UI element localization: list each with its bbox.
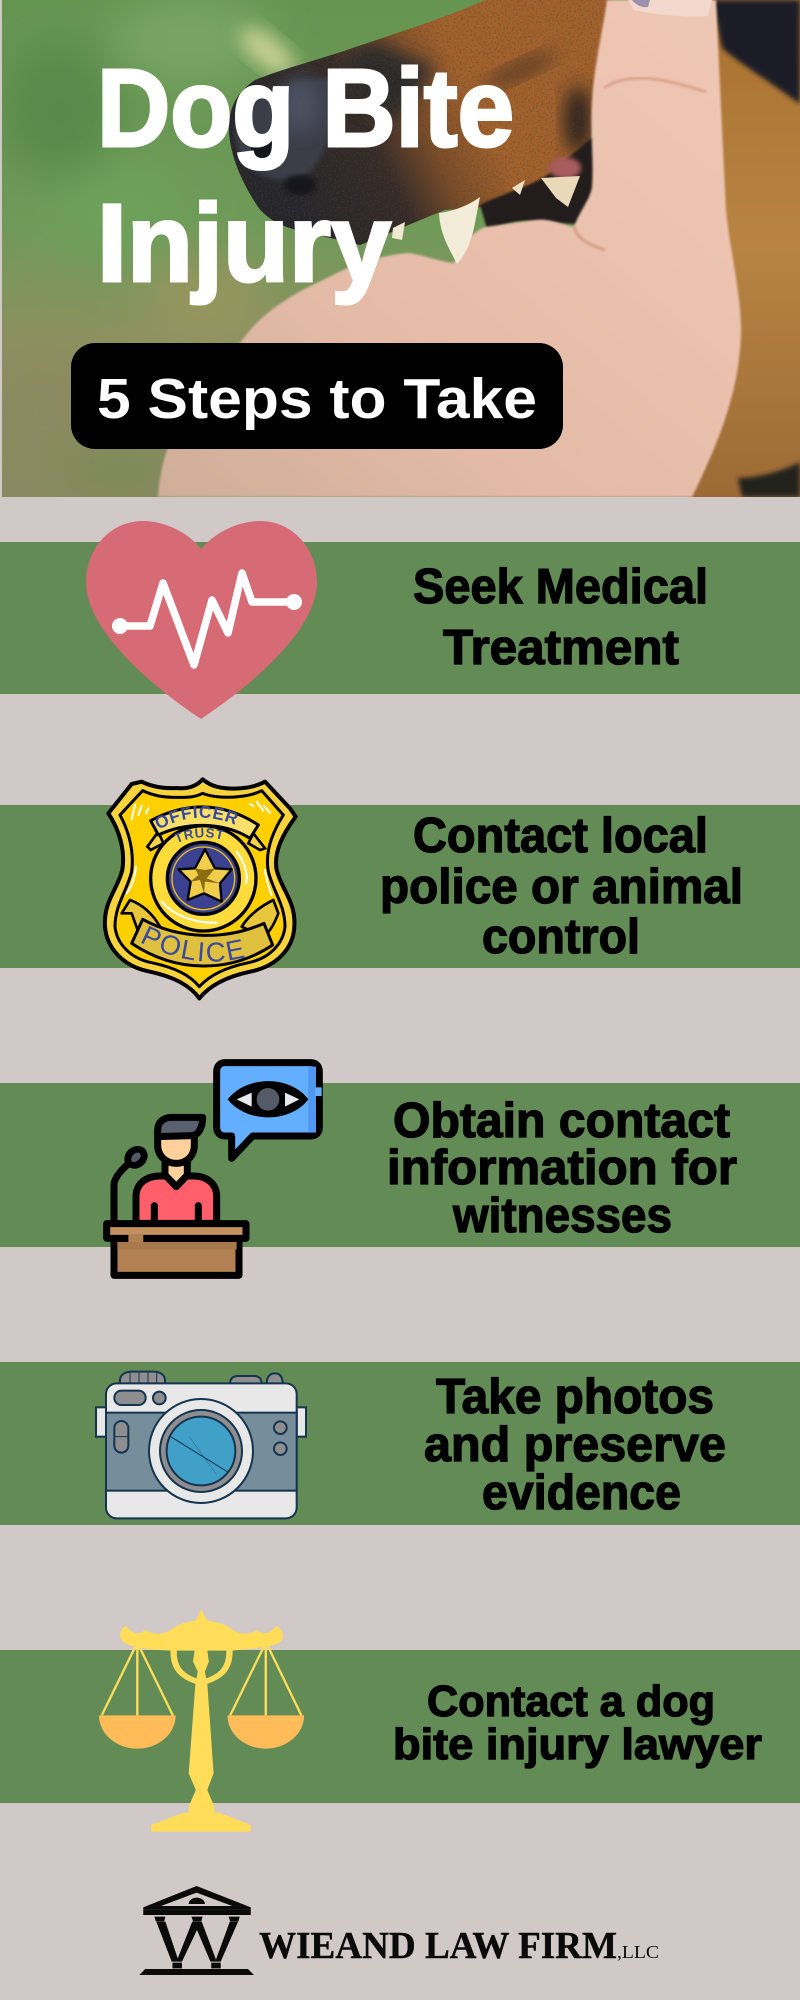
- title: Dog Bite Injury: Dog Bite: [97, 47, 514, 170]
- step 4 text: [424, 1370, 726, 1520]
- subtitle pill: 5 Steps to Take: 5 Steps to Take: [97, 367, 537, 431]
- subtitle pill: 5 Steps to Take: [71, 343, 563, 449]
- dog mouth interior: [480, 135, 595, 232]
- step 3 text: Obtain contact: [393, 1094, 730, 1148]
- teeth: [439, 197, 480, 264]
- logo emblem: columned temple with W: [139, 1886, 254, 1975]
- step 2 text: [380, 809, 743, 964]
- logo suffix: ,LLC: [617, 1942, 659, 1962]
- step 3 text: information for: [387, 1141, 737, 1195]
- icon: heart with pulse line: [86, 521, 317, 719]
- step 4 band: take photos and preserve evidence: [0, 1362, 800, 1525]
- step 1 text: [413, 560, 708, 675]
- step 5 text: bite injury lawyer: [393, 1720, 762, 1769]
- step 2 band: contact police or animal control: [0, 777, 800, 1000]
- step 4 text: and preserve: [424, 1418, 726, 1472]
- dog fur right side: [690, 0, 800, 497]
- step 5 text: Contact a dog: [427, 1677, 715, 1726]
- icon: scales of justice: [99, 1609, 304, 1832]
- step 2 text: police or animal: [380, 860, 743, 914]
- step 3 text: [387, 1094, 737, 1243]
- icon: witness at podium with eye speech bubble: [107, 1063, 322, 1275]
- title: Dog Bite Injury: [97, 47, 514, 305]
- step 5 band: contact a dog bite injury lawyer: [0, 1609, 800, 1832]
- step 2 text: Contact local: [413, 809, 708, 863]
- dog muzzle: [220, 0, 620, 250]
- panel: hero photo of dog biting hand: [0, 0, 800, 500]
- icon: police badge: POLICE: [141, 926, 245, 962]
- dog nose: [235, 78, 333, 180]
- step 2 text: control: [482, 910, 640, 964]
- step 4 text: Take photos: [436, 1370, 714, 1424]
- step 1 text: Treatment: [443, 621, 679, 675]
- microphone: [114, 1162, 131, 1223]
- step 5 text: [393, 1677, 762, 1769]
- speaker: [136, 1176, 217, 1223]
- logo wordmark: WIEAND LAW FIRM: [259, 1925, 617, 1967]
- step 4 text: evidence: [482, 1466, 681, 1520]
- icon: camera: [96, 1372, 306, 1518]
- icon: police badge: [102, 777, 298, 1000]
- icon: police badge: TRUST: [174, 828, 224, 842]
- step 1 band: seek medical treatment: [0, 521, 800, 719]
- title: Dog Bite Injury: Injury: [97, 182, 391, 305]
- step 3 text: witnesses: [452, 1189, 672, 1243]
- hand: [158, 0, 741, 497]
- speech bubble with eye: [217, 1063, 322, 1158]
- podium: [114, 1238, 239, 1275]
- icon: police badge: OFFICER: [156, 806, 238, 828]
- step 3 band: obtain contact information for witnesses: [0, 1063, 800, 1275]
- step 1 text: Seek Medical: [413, 560, 708, 614]
- logo: Wieand Law Firm: [139, 1886, 659, 1975]
